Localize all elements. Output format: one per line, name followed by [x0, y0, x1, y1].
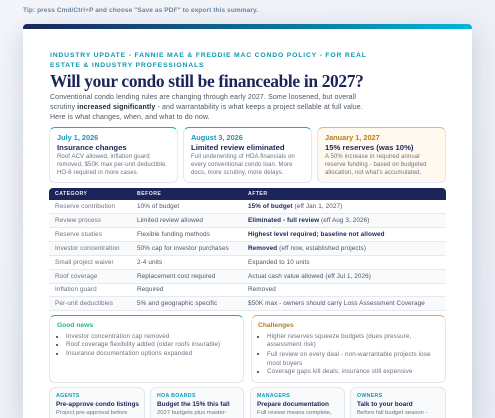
row: investor concentration: 50% cap for investor purchases	[137, 245, 229, 252]
row: small project waiver	[49, 256, 446, 270]
date card: August 3, 2026: every conventional condo loan. More	[191, 162, 293, 168]
panel: good news: Insurance documentation options expanded	[66, 350, 192, 357]
intro paragraph: Here is what changes, when, and what to do now.	[50, 114, 210, 120]
row: small project waiver: 2-4 units	[137, 259, 162, 266]
action card: owners: Before fall budget season -	[357, 410, 427, 416]
date card: August 3, 2026: August 3, 2026	[191, 133, 243, 142]
row: small project waiver: Expanded to 10 units	[248, 259, 310, 266]
date card: July 1, 2026: Roof ACV allowed, inflation guard	[57, 154, 150, 160]
row: roof coverage: Actual cash value allowed (eff Jul 1, 2026)	[248, 272, 371, 280]
row: roof coverage	[49, 270, 446, 284]
table header: CATEGORY	[55, 191, 87, 197]
row: inflation guard: Inflation guard	[55, 286, 97, 293]
row: per-unit deductibles: $50K max - owners should carry Loss Assessment Coverage	[248, 300, 425, 307]
action card: agents: AGENTS	[56, 393, 80, 399]
date card: January 1, 2027: January 1, 2027	[325, 133, 380, 142]
row: per-unit deductibles	[49, 297, 446, 311]
row: reserve contribution: Reserve contribution	[55, 203, 115, 210]
title: Will your condo still be financeable in 2027?	[50, 71, 364, 91]
row: reserve studies	[49, 228, 446, 242]
date card: July 1, 2026: July 1, 2026	[57, 133, 98, 142]
row: reserve studies: Flexible funding methods	[137, 231, 210, 238]
tip line: Tip: press Cmd/Ctrl+P and choose "Save as PDF" to export this summary.	[23, 7, 258, 14]
date card: January 1, 2027: A 50% increase in required annual	[325, 154, 420, 160]
row: small project waiver: Small project waiver	[55, 259, 114, 266]
row: review process: Eliminated - full review (eff Aug 3, 2026)	[248, 217, 370, 224]
panel: good news	[49, 315, 244, 383]
action card: owners	[350, 387, 446, 418]
panel: challenges: Challenges	[258, 322, 294, 329]
panel: challenges: assessment risk)	[267, 341, 316, 348]
row: reserve contribution: 10% of budget	[137, 203, 179, 210]
intro paragraph	[50, 94, 363, 120]
date card: July 1, 2026: removed, $50K max per-unit deductible,	[57, 162, 167, 168]
row: roof coverage: Replacement cost required	[137, 272, 215, 280]
eyebrow: ESTATE & INDUSTRY PROFESSIONALS	[50, 62, 204, 68]
action card: owners: Talk to your board	[357, 401, 413, 408]
row: review process	[49, 214, 446, 228]
table header: BEFORE	[137, 191, 161, 197]
action card: managers	[250, 387, 345, 418]
row: inflation guard: Removed	[248, 286, 276, 293]
date card: January 1, 2027	[317, 127, 446, 183]
action card: agents: Pre-approve condo listings	[56, 401, 139, 408]
table header	[49, 188, 446, 200]
panel: challenges	[251, 315, 446, 383]
action card: agents: Project pre-approval before	[56, 410, 127, 416]
row: inflation guard	[49, 283, 446, 297]
action card: HOA boards	[150, 387, 244, 418]
action card: HOA boards: 2027 budgets plus master-	[157, 410, 227, 416]
row: reserve studies: Highest level required; baseline not allowed	[248, 231, 385, 238]
action card: managers: Prepare documentation	[257, 401, 329, 408]
panel: good news: Roof coverage flexibility added (older roofs insurable)	[66, 341, 220, 348]
date card: August 3, 2026	[183, 127, 312, 183]
action card: owners: OWNERS	[357, 393, 382, 399]
row: reserve studies: Reserve studies	[55, 231, 102, 238]
date card: January 1, 2027: 15% reserves (was 10%)	[325, 143, 413, 152]
date card: July 1, 2026	[49, 127, 178, 183]
action card: HOA boards: Budget the 15% this fall	[157, 401, 230, 408]
row: per-unit deductibles: Per-unit deductibles	[55, 300, 113, 307]
table header: AFTER	[248, 191, 268, 197]
date card: August 3, 2026: Limited review eliminated	[191, 143, 285, 152]
action card: managers: MANAGERS	[257, 393, 290, 399]
panel: challenges: most buyers	[267, 360, 302, 367]
row: investor concentration: Removed (eff now, established projects)	[248, 245, 366, 252]
row: inflation guard: Required	[137, 286, 164, 293]
panel: good news: Investor concentration cap removed	[66, 333, 170, 340]
eyebrow: INDUSTRY UPDATE - FANNIE MAE & FREDDIE MAC CONDO POLICY - FOR REAL	[50, 52, 367, 58]
row: roof coverage: Roof coverage	[55, 272, 98, 280]
date card: January 1, 2027: reserve funding - based on budgeted	[325, 162, 427, 168]
date card: August 3, 2026: Full underwriting of HOA financials on	[191, 154, 295, 160]
row: investor concentration	[49, 242, 446, 256]
intro paragraph: Conventional condo lending rules are changing through early 2027. Some loosened, but overall	[50, 94, 356, 100]
date card: August 3, 2026: docs, more scrutiny, more delays.	[191, 170, 284, 176]
intro paragraph: scrutiny increased significantly - and warrantability is what keeps a project sellable at full value.	[50, 104, 363, 110]
eyebrow	[50, 52, 367, 68]
row: review process: Review process	[55, 217, 101, 224]
date card: January 1, 2027: allocation, not what's accumulated.	[325, 170, 421, 176]
panel: challenges: Full review on every deal - non-warrantable projects lose	[267, 351, 431, 358]
action card: HOA boards: HOA BOARDS	[157, 393, 196, 399]
row: review process: Limited review allowed	[137, 217, 203, 224]
action card: managers: Full review means complete,	[257, 410, 332, 416]
action card: agents	[49, 387, 145, 418]
row: per-unit deductibles: 5% and geographic specific	[137, 300, 217, 307]
comparison table	[49, 188, 446, 311]
row: reserve contribution	[49, 200, 446, 214]
panel: good news: Good news	[57, 322, 93, 329]
row: reserve contribution: 15% of budget (eff Jan 1, 2027)	[248, 203, 342, 210]
panel: challenges: Higher reserves squeeze budgets (dues pressure,	[267, 333, 411, 340]
panel: challenges: Coverage gaps kill deals; insurance still expensive	[267, 368, 412, 375]
date card: July 1, 2026: Insurance changes	[57, 143, 127, 152]
date card: July 1, 2026: HO-6 required in more cases.	[57, 170, 138, 176]
gradient top bar	[23, 24, 472, 29]
row: investor concentration: Investor concentration	[55, 245, 120, 252]
